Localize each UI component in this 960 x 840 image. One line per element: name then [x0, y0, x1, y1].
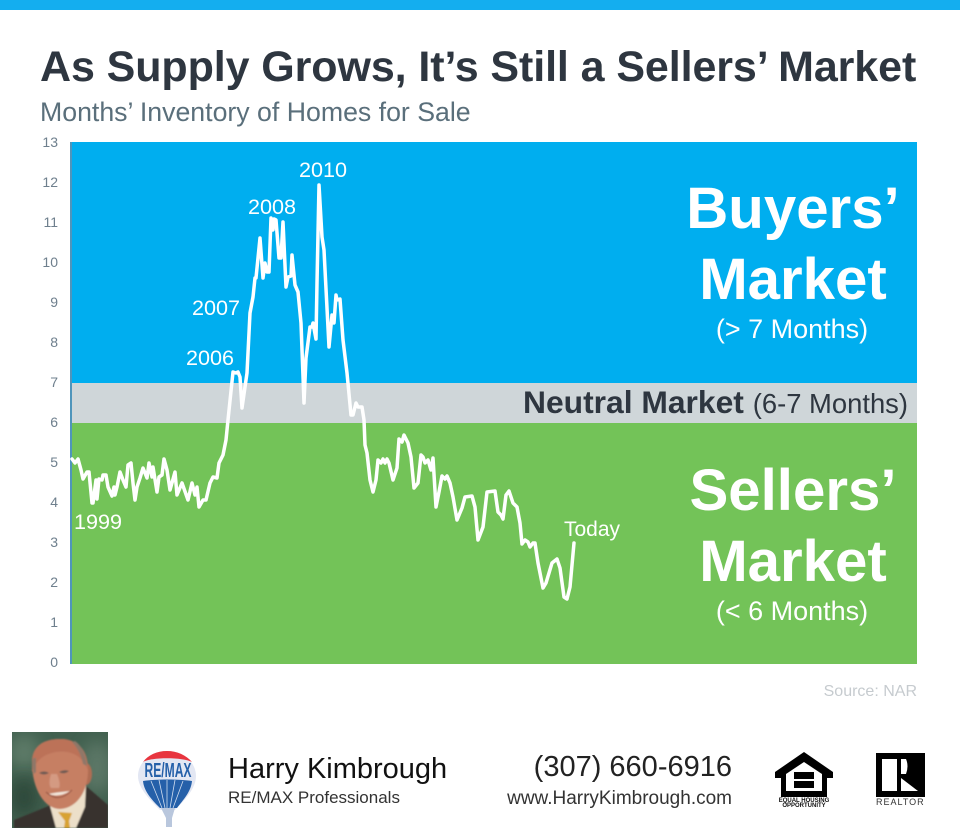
buyers range: (> 7 Months) [716, 314, 868, 344]
y axis labels: 13 [42, 134, 58, 150]
heading: Buyers' Market: Buyers’ [686, 176, 900, 241]
heading: Neutral Market: Neutral Market (6-7 Months) [523, 384, 908, 420]
y axis labels: 10 [42, 254, 58, 270]
year label: 2007: 2007 [192, 295, 240, 320]
y axis labels: 2 [50, 574, 58, 590]
icon: equal housing opportunity: EQUAL HOUSING [779, 798, 829, 804]
logo: RE/MAX balloon [138, 751, 196, 827]
title: As Supply Grows, It’s Still a Sellers’ Market [40, 43, 916, 91]
phone: (307) 660-6916 [534, 751, 732, 783]
y axis labels: 4 [50, 494, 58, 510]
sellers range: (< 6 Months) [716, 596, 868, 626]
panel: buyers market band [70, 142, 917, 383]
y axis labels: 0 [50, 654, 58, 670]
year label: Today: Today [564, 518, 620, 541]
photo: agent portrait [12, 732, 108, 828]
icon: equal housing opportunity: OPPORTUNITY [782, 803, 826, 809]
y axis labels: 7 [50, 374, 58, 390]
website: www.HarryKimbrough.com [507, 788, 732, 809]
panel: neutral market band [70, 383, 917, 423]
y axis labels: 1 [50, 614, 58, 630]
y axis labels: 9 [50, 294, 58, 310]
text: Market [699, 529, 887, 594]
agent name: Harry Kimbrough [228, 753, 447, 785]
text: Market [699, 247, 887, 312]
year label: 2006: 2006 [186, 345, 234, 370]
y axis labels: 6 [50, 414, 58, 430]
year label: 2008: 2008 [248, 194, 296, 219]
subtitle: Months’ Inventory of Homes for Sale [40, 97, 471, 127]
panel: sellers market band [70, 423, 917, 664]
icon: realtor [876, 753, 925, 807]
source note: Source: NAR [824, 683, 917, 700]
heading: Sellers' Market: Sellers’ [689, 458, 897, 523]
y axis labels: 12 [42, 174, 58, 190]
y axis labels: 8 [50, 334, 58, 350]
y axis labels [42, 134, 58, 670]
year label: 1999: 1999 [74, 509, 122, 534]
year label: 2010: 2010 [299, 157, 347, 182]
icon: equal housing opportunity [775, 752, 833, 809]
top accent bar [0, 0, 960, 10]
brokerage: RE/MAX Professionals [228, 788, 400, 807]
y axis line [70, 142, 72, 664]
y axis labels: 3 [50, 534, 58, 550]
y axis labels: 5 [50, 454, 58, 470]
icon: realtor: REALTOR [876, 797, 925, 807]
y axis labels: 11 [43, 214, 58, 230]
